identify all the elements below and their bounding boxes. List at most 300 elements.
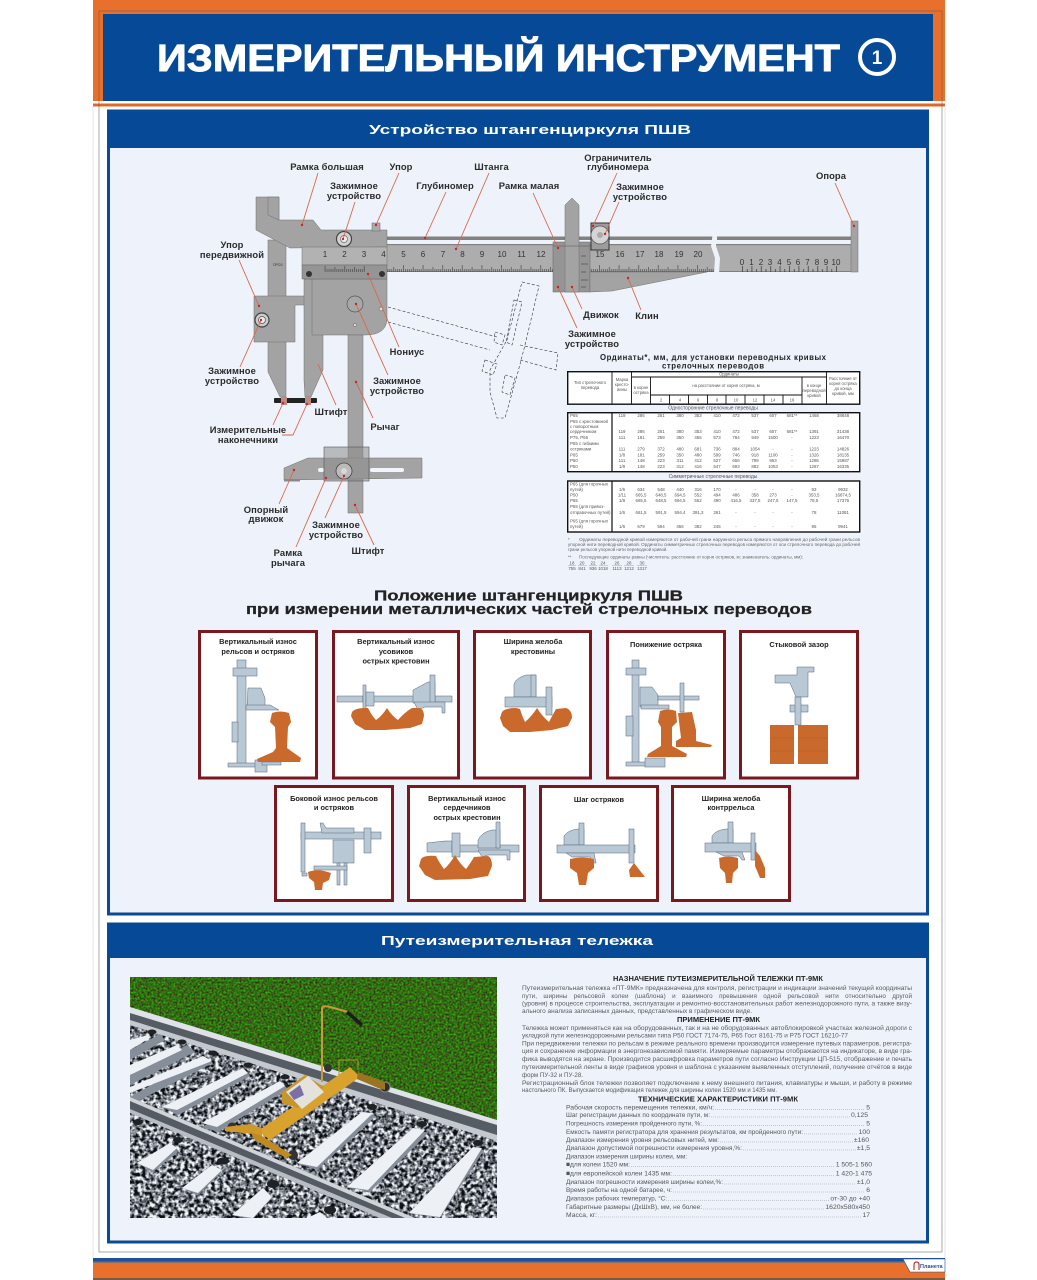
table header: переводной — [802, 388, 826, 393]
table header: 16 — [790, 398, 795, 402]
table body: one-sided switches: 148 — [637, 464, 645, 469]
scale numbers: 5 — [401, 250, 406, 259]
card: vertical wear of rails and switch rails — [200, 632, 316, 778]
callouts and labels: Зажимное — [568, 328, 616, 339]
movable stop — [254, 296, 305, 342]
table body: symmetric switches: - — [735, 524, 737, 529]
table body: one-sided switches: 537 — [751, 413, 759, 418]
callouts and labels: устройство — [370, 385, 424, 396]
table body: one-sided switches: 1500 — [768, 435, 778, 440]
card: joint gap: Стыковой зазор — [769, 640, 829, 649]
clamps — [255, 223, 380, 327]
table body: one-sided switches: 410 — [713, 413, 721, 418]
table body: one-sided switches: с поворотным — [570, 424, 598, 429]
text: trolley application: При передвижении тележки по рельсам в режиме реального времени производится измерение путевых параметров, регистра- — [522, 1040, 912, 1048]
table footnotes: ** — [568, 554, 572, 560]
table body: symmetric switches: 466 — [676, 524, 684, 529]
callouts and labels: Движок — [583, 309, 619, 320]
table body: one-sided switches: 949 — [751, 435, 759, 440]
break gap — [711, 232, 720, 274]
table body: one-sided switches: 286 — [637, 429, 645, 434]
table body: symmetric switches: 78 — [812, 510, 817, 515]
scale numbers: 9 — [480, 250, 485, 259]
callouts and labels: устройство — [327, 190, 381, 201]
card: switch rail pitch — [540, 786, 658, 900]
table body: symmetric switches: 1/8 — [619, 498, 626, 503]
table header: Марка — [616, 377, 629, 382]
card: vertical wear of frog wing rails: острых крестовин — [362, 656, 430, 666]
table body: one-sided switches: 882 — [751, 464, 759, 469]
vernier frame — [302, 247, 387, 279]
table body: one-sided switches: 681 — [694, 446, 702, 452]
table body: one-sided switches: 181 — [637, 452, 645, 458]
card: vertical wear of rails and switch rails: рельсов и остряков — [221, 647, 295, 656]
card: vertical wear of rails and switch rails: Вертикальный износ — [219, 637, 297, 646]
ordinates table — [568, 371, 861, 571]
card: check rail flangeway width: контррельса — [708, 803, 755, 812]
table body: one-sided switches: 279 — [637, 446, 645, 452]
support leg — [851, 221, 858, 272]
text: technical specifications: 1 420-1 475 — [836, 1170, 872, 1178]
table footnotes: 30 — [640, 560, 645, 566]
footer band — [93, 1258, 945, 1280]
table body: one-sided switches: 223 — [657, 464, 665, 469]
table body: one-sided switches: Р65 — [570, 413, 578, 418]
card: vertical wear of frog wing rails — [334, 632, 458, 778]
table body: one-sided switches: 480 — [676, 446, 684, 452]
sleepers — [130, 1034, 484, 1220]
table body: one-sided switches: 1/8 — [619, 452, 626, 458]
table body: one-sided switches: 353 — [694, 429, 702, 434]
text: technical specifications: 0,125 — [851, 1112, 868, 1119]
text: trolley purpose: Путеизмерительная тележка «ПТ-9МК» предназначена для контроля, регистрации и индикации значений текущей координаты — [522, 984, 912, 992]
table body: one-sided switches: 38848 — [837, 413, 850, 418]
heading: caliper position: при измерении металлических частей стрелочных переводов — [246, 602, 812, 618]
table body: symmetric switches: 245 — [713, 524, 721, 529]
table body: one-sided switches: 18135 — [837, 452, 850, 458]
table body: one-sided switches: Р75, Р65 — [570, 435, 589, 440]
text: technical specifications: ■для европейской колеи 1435 мм: — [566, 1170, 672, 1178]
table body: one-sided switches: 1223 — [809, 435, 819, 440]
table body: symmetric switches: 486 — [732, 492, 740, 498]
table footnotes: Последующие ординаты равны (числитель: расстояние от корня остряков, м; знаменатель: ординаты, мм): — [579, 554, 803, 560]
scale numbers: 3 — [362, 250, 367, 259]
callouts and labels: Клин — [635, 310, 659, 321]
table footnotes: * — [568, 537, 570, 542]
callouts and labels: Опорный — [244, 504, 288, 515]
card: frog flangeway width: Ширина желоба — [504, 637, 563, 646]
card: joint gap — [740, 632, 858, 778]
text: technical specifications: Масса, кг: — [566, 1212, 597, 1219]
table body: one-sided switches: 353 — [694, 413, 702, 418]
table body: symmetric switches: 273 — [769, 492, 777, 498]
card: check rail flangeway width — [672, 786, 790, 900]
rails — [130, 1007, 497, 1218]
table body: one-sided switches: 472 — [732, 429, 740, 434]
text: trolley application: укладкой пути железнодорожными рельсами типа Р50 ГОСТ 7174-75, Р65 Гост 8161-75 и Р75 ГОСТ 16210-77 — [522, 1032, 848, 1040]
table footnotes: 20 — [580, 560, 585, 566]
table body: one-sided switches: 455 — [694, 435, 702, 440]
scale numbers: 6 — [421, 250, 426, 259]
table header: корня остряка — [829, 381, 857, 386]
scale numbers: 7 — [441, 250, 446, 259]
callouts and labels: устройство — [565, 338, 619, 349]
table body: one-sided switches: 1391 — [809, 429, 819, 434]
text: technical specifications: Диапазон погрешности измерения ширины колеи,%: — [566, 1179, 723, 1186]
table body: symmetric switches: - — [772, 510, 774, 515]
callouts and labels: Зажимное — [373, 375, 421, 386]
text: trolley application: форм ПУ-32 и ПУ-28. — [522, 1072, 583, 1079]
table body: symmetric switches: путей) — [570, 524, 583, 529]
scale numbers: 4 — [777, 258, 782, 267]
heading: caliper position: Положение штангенциркуля ПШВ — [374, 588, 683, 604]
table header: в конце — [807, 383, 822, 388]
text: trolley purpose: ального анализа записанных данных, представленных в графическом виде. — [522, 1008, 752, 1015]
table body: one-sided switches: 607 — [769, 429, 777, 434]
scale numbers: 6 — [796, 258, 801, 267]
table footnotes: 936 — [589, 566, 597, 571]
table body: one-sided switches: 798 — [751, 458, 759, 463]
trolley — [225, 1006, 390, 1160]
table body: one-sided switches: 547 — [713, 464, 721, 469]
card: vertical wear of frog core: сердечников — [443, 803, 491, 812]
text: technical specifications: 100 — [859, 1129, 870, 1136]
table footnotes: грани рельсов упорной нити переводной кривой. — [568, 547, 668, 552]
table body: one-sided switches: 380 — [676, 429, 684, 434]
table body: symmetric switches: - — [754, 510, 756, 515]
callouts and labels: Штифт — [315, 406, 348, 417]
table body: one-sided switches: 607 — [769, 413, 777, 418]
scale numbers — [323, 250, 841, 267]
table body: symmetric switches: - — [772, 524, 774, 529]
callouts and labels: устройство — [205, 375, 259, 386]
table body: one-sided switches: 1223 — [809, 446, 819, 452]
callouts and labels: устройство — [309, 529, 363, 540]
scale numbers: 11 — [517, 250, 526, 259]
card: vertical wear of frog core: острых крестовин — [433, 813, 501, 822]
card: switch rail pitch: Шаг остряков — [574, 795, 625, 804]
table body: symmetric switches: 594,4 — [674, 510, 686, 515]
table body: symmetric switches: - — [791, 510, 793, 515]
table body: symmetric switches: 9941 — [838, 524, 848, 529]
scale numbers: 20 — [694, 250, 703, 259]
table header: перевода — [581, 385, 600, 390]
table title: Ординаты*, мм, для установки переводных кривых — [600, 353, 827, 362]
table body: symmetric switches: 337,5 — [750, 498, 761, 503]
table body: one-sided switches: 259 — [657, 435, 665, 440]
table header: Ординаты — [719, 372, 739, 376]
table body: one-sided switches: 884 — [732, 446, 740, 452]
caliper drawing: ПРОЗ — [273, 263, 283, 267]
text: technical specifications: Емкость памяти регистратора для хранения результатов, км пройденного пути: — [566, 1128, 803, 1136]
scale numbers: 15 — [596, 250, 605, 259]
fixed jaw — [268, 240, 286, 397]
main bar with scale — [387, 244, 858, 272]
table body: symmetric switches: 548 — [657, 487, 665, 492]
table body: symmetric switches: - — [754, 487, 756, 492]
table body: one-sided switches: - — [791, 452, 793, 458]
table body: symmetric switches: - — [735, 510, 737, 515]
callouts and labels: движок — [249, 513, 284, 524]
scale numbers: 12 — [537, 250, 546, 259]
table body: one-sided switches: 111 — [619, 446, 626, 452]
text: trolley application: фика выводятся на экране. Производится расшифровка параметров пути согласно Инструкции ЦП-515, отображение и печать — [522, 1055, 913, 1063]
table body: one-sided switches: 1286 — [809, 458, 819, 463]
table header: до конца — [834, 386, 852, 391]
table body: symmetric switches: - — [791, 492, 793, 498]
scale numbers: 8 — [460, 250, 465, 259]
callouts and labels: Нониус — [390, 346, 424, 357]
table body: one-sided switches: 1/8 — [619, 464, 626, 469]
table body: one-sided switches: Р65 с крестовиной — [570, 419, 609, 424]
card: side wear: и остряков — [314, 803, 355, 812]
callouts and labels: Опора — [816, 170, 847, 181]
card: check rail flangeway width: Ширина желоба — [702, 794, 761, 803]
table body: symmetric switches: 1/11 — [618, 492, 627, 498]
card: vertical wear of frog wing rails: усовиков — [379, 647, 414, 656]
callouts and labels: Штифт — [352, 545, 385, 556]
card: frog flangeway width — [474, 632, 590, 778]
table body: one-sided switches: 681** — [787, 429, 798, 434]
table header: вины — [617, 387, 627, 392]
depth limiter — [591, 223, 609, 250]
callouts and labels: Рамка малая — [499, 180, 559, 191]
callouts and labels: глубиномера — [587, 161, 650, 172]
table footnotes: 26 — [615, 560, 620, 566]
logo: Планета — [920, 1264, 944, 1270]
table body: symmetric switches: - — [754, 524, 756, 529]
table title — [600, 353, 827, 370]
table body: symmetric switches: 591,5 — [656, 510, 667, 515]
table body: one-sided switches: 1053 — [768, 464, 778, 469]
table body: one-sided switches: 259 — [657, 452, 665, 458]
icon: sheet number — [860, 40, 894, 74]
table body: one-sided switches: 784 — [732, 435, 740, 440]
table body: one-sided switches: 953 — [769, 458, 777, 463]
table body: symmetric switches: 694,5 — [674, 498, 686, 503]
table body: symmetric switches: 634 — [637, 487, 645, 492]
text: technical specifications: 5 — [866, 1104, 870, 1112]
table body: symmetric switches: 9932 — [838, 487, 848, 492]
table body: one-sided switches: 15987 — [837, 458, 850, 463]
callouts and labels: Зажимное — [616, 181, 664, 192]
text: technical specifications: ±1,5 — [857, 1145, 870, 1152]
table body: symmetric switches: 1/6 — [619, 510, 626, 515]
wedge — [590, 272, 707, 292]
table footnotes — [568, 537, 861, 571]
callouts and labels: передвижной — [200, 249, 264, 260]
callouts and labels: Рычаг — [370, 421, 400, 432]
logo — [903, 1259, 945, 1272]
text: technical specifications: Диапазон измерения уровня рельсовых нитей, мм: — [566, 1136, 719, 1144]
callouts and labels: Зажимное — [312, 519, 360, 530]
table header: 6 — [697, 398, 700, 402]
card: vertical wear of frog core — [408, 786, 524, 900]
photo: measuring trolley on track — [130, 977, 497, 1220]
table header: кривой — [807, 393, 821, 398]
callouts and labels: Штанга — [474, 161, 509, 172]
scale numbers: 2 — [759, 258, 764, 267]
table body: symmetric switches: Р65 (для горочных — [570, 518, 609, 524]
table body: one-sided switches: 1468 — [809, 413, 819, 418]
text: technical specifications: Диапазон допустимой погрешности измерения уровня,%: — [566, 1144, 742, 1152]
card: side wear — [276, 786, 392, 900]
icon: sheet number: 1 — [872, 48, 883, 69]
table body: symmetric switches: 358 — [751, 492, 759, 498]
table body: symmetric switches: 1/6 — [619, 487, 626, 492]
table header — [568, 371, 860, 404]
table body: symmetric switches: 494 — [713, 492, 721, 498]
table body: one-sided switches: 350 — [676, 452, 684, 458]
text: technical specifications: 6 — [866, 1187, 870, 1194]
callouts and labels: Рамка большая — [290, 161, 364, 172]
table body: one-sided switches: 31438 — [837, 429, 850, 434]
text: technical specifications: 1620х580х450 — [825, 1204, 870, 1211]
second jaw — [304, 279, 323, 397]
subheading: symmetric: Симметричные стрелочные переводы — [669, 474, 758, 480]
table body: symmetric switches: 11081 — [837, 510, 849, 515]
table footnotes: 1113 — [612, 566, 622, 571]
dashed alternate lever position — [388, 282, 558, 418]
table body: one-sided switches: - — [791, 464, 793, 469]
table body: one-sided switches: сердечником — [570, 429, 596, 434]
tips — [274, 397, 317, 405]
lower body — [312, 279, 387, 335]
text: technical specifications — [566, 1096, 872, 1219]
caliper drawing — [254, 197, 858, 513]
table body: symmetric switches: - — [772, 487, 774, 492]
text: technical specifications: Погрешность измерения пройденного пути, %: — [566, 1120, 702, 1128]
table body: one-sided switches: 181 — [637, 435, 645, 440]
table body: one-sided switches: Р50 — [570, 458, 578, 463]
table body: symmetric switches: - — [791, 524, 793, 529]
table header: Тип стрелочного — [574, 380, 607, 385]
table body: one-sided switches: 14826 — [837, 446, 850, 452]
table body: symmetric switches: 648,5 — [656, 492, 667, 498]
callouts and labels: Ограничитель — [584, 152, 652, 163]
table footnotes: 1317 — [637, 566, 647, 571]
card: switch rail lowering — [608, 632, 724, 778]
table body: one-sided switches: 312 — [676, 464, 684, 469]
table body: symmetric switches: 440 — [676, 487, 684, 492]
table body: one-sided switches: 1326 — [809, 452, 819, 458]
text: technical specifications: Диапазон измерения ширины колеи, мм: — [566, 1154, 687, 1160]
table body: symmetric switches: - — [791, 487, 793, 492]
table footnotes: упорной нити переводной кривой. Ординаты симметричных стрелочных переводов измеряются от оси стрелочного перевода до рабочей — [568, 542, 861, 547]
table footnotes: 24 — [601, 560, 606, 566]
table body: one-sided switches: 412 — [694, 458, 702, 463]
text: technical specifications: Рабочая скорость перемещения тележки, км/ч: — [566, 1104, 714, 1112]
table body: one-sided switches: 537 — [751, 429, 759, 434]
table footnotes: 28 — [627, 560, 632, 566]
callouts and labels: Упор — [220, 239, 244, 250]
panel: caliper section — [108, 110, 928, 914]
table body: symmetric switches: 16874,5 — [835, 492, 851, 498]
table body: one-sided switches: 656 — [732, 458, 740, 463]
depth gauge rod — [387, 236, 852, 240]
table body: symmetric switches: отправочных путей) — [570, 510, 611, 515]
table header: кривой, мм — [832, 391, 854, 396]
table body: one-sided switches: 286 — [637, 413, 645, 418]
text: trolley purpose: (уровня) в процессе строительства, эксплуатации и ремонтно-восстановительных работ железнодорожного пути, а также визу- — [522, 1000, 912, 1008]
table body: symmetric switches: 78,5 — [810, 498, 819, 503]
table header: в корне — [634, 385, 649, 390]
table body: one-sided switches: - — [791, 458, 793, 463]
table body: symmetric switches: 1/6 — [619, 524, 626, 529]
table body: one-sided switches — [568, 412, 860, 472]
table body: one-sided switches: 251 — [657, 413, 665, 418]
table body: symmetric switches: 261 — [713, 510, 721, 515]
table body: one-sided switches: 573 — [713, 435, 721, 440]
text: technical specifications: ТЕХНИЧЕСКИЕ ХАРАКТЕРИСТИКИ ПТ-9МК — [638, 1096, 799, 1104]
scale numbers: 2 — [342, 250, 347, 259]
table body: one-sided switches: 16335 — [837, 464, 850, 469]
table body: symmetric switches: 490 — [713, 498, 721, 503]
table body: symmetric switches: 147,5 — [786, 498, 798, 503]
scale numbers: 1 — [323, 250, 328, 259]
table body: one-sided switches: 681** — [787, 413, 798, 418]
scale numbers: 0 — [740, 258, 745, 267]
table body: one-sided switches: 311 — [676, 458, 684, 463]
table body: one-sided switches: - — [772, 446, 774, 452]
table body: one-sided switches: - — [791, 435, 793, 440]
callouts and labels: Глубиномер — [416, 180, 474, 191]
text: trolley application: ПРИМЕНЕНИЕ ПТ-9МК — [677, 1017, 761, 1024]
table body: symmetric switches: 665,5 — [636, 492, 647, 498]
table footnotes: 1018 — [598, 566, 608, 571]
table body: one-sided switches: 372 — [657, 446, 665, 452]
table body: symmetric switches: 665,5 — [636, 498, 647, 503]
scale numbers: 18 — [655, 250, 664, 259]
callouts and labels: устройство — [613, 191, 667, 202]
text: technical specifications: 1 505-1 560 — [836, 1162, 872, 1168]
table body: symmetric switches: 93 — [812, 487, 817, 492]
scale numbers: 1 — [749, 258, 754, 267]
table body: one-sided switches: 223 — [657, 458, 665, 463]
card: vertical wear of frog core: Вертикальный износ — [428, 794, 506, 803]
table body: symmetric switches: 316 — [694, 487, 702, 492]
table header: 10 — [734, 398, 739, 402]
scale numbers: 5 — [787, 258, 792, 267]
table header: 8 — [716, 398, 719, 402]
text: technical specifications: Габаритные размеры (ДхШхВ), мм, не более: — [566, 1203, 702, 1211]
text: technical specifications: ±1,0 — [857, 1179, 870, 1186]
text: trolley purpose — [522, 974, 912, 1015]
lever frame and support slider — [284, 447, 422, 482]
table footnotes: Ординаты переводной кривой измеряются от рабочей грани наружного рельса прямого направления до рабочей грани рельсов — [579, 537, 861, 542]
table header: 12 — [753, 398, 758, 402]
table body: one-sided switches: 736 — [713, 446, 721, 452]
table header: кресто- — [615, 382, 630, 387]
callouts and labels: Зажимное — [208, 365, 256, 376]
table title: стрелочных переводов — [662, 362, 764, 370]
table body: one-sided switches: 111 — [619, 435, 626, 440]
scale numbers: 7 — [805, 258, 810, 267]
small frame — [553, 198, 590, 292]
rail fasteners — [133, 1030, 483, 1214]
table header: остряка — [633, 390, 649, 395]
table body: one-sided switches: - — [791, 446, 793, 452]
text: trolley application: Тележка может применяться как на оборудованных, так и на не оборудованных автоблокировкой участках железной дороги с — [522, 1024, 912, 1032]
table body: symmetric switches: 416,5 — [730, 498, 742, 503]
heading: track trolley: Путеизмерительная тележка — [381, 933, 654, 948]
table body: symmetric switches: 353,5 — [808, 492, 820, 498]
scale numbers: 17 — [636, 250, 645, 259]
table body: one-sided switches: 1054 — [750, 446, 760, 452]
table footnotes: 755 — [568, 566, 576, 571]
text: trolley application: ция и сохранение информации в энергонезависимой памяти. Измеряемые параметры отображаются на индикаторе, в виде гра- — [522, 1047, 912, 1055]
table body: one-sided switches: 746 — [732, 452, 740, 458]
